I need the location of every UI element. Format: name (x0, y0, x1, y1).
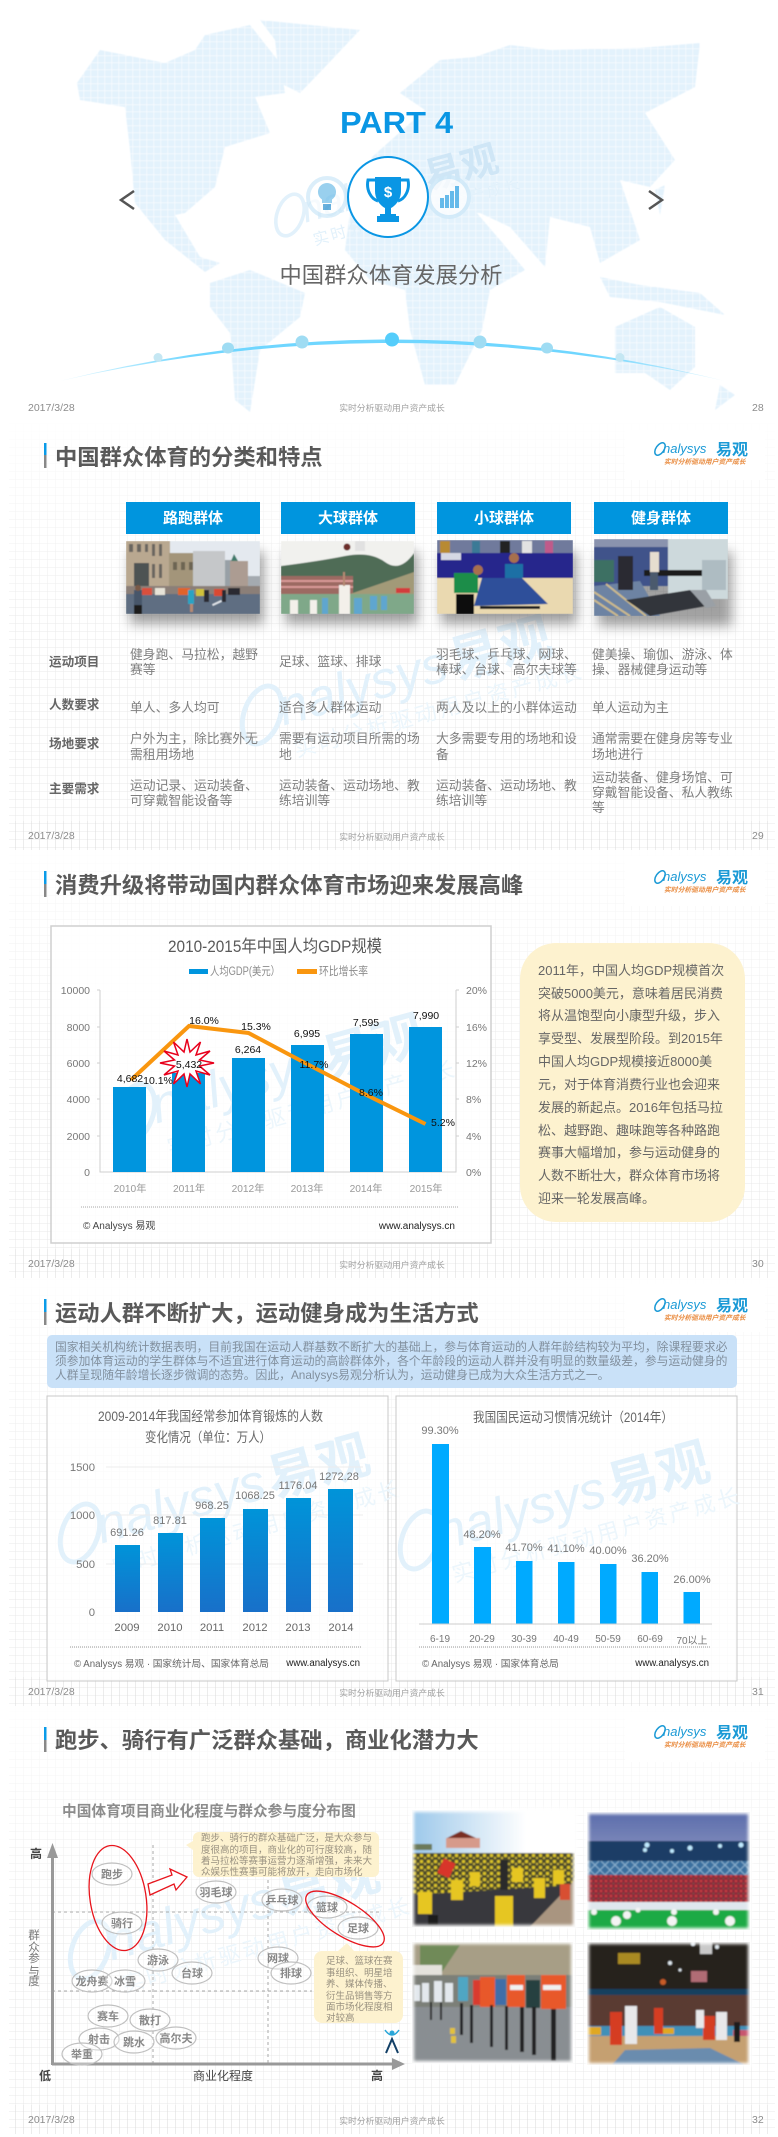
logo: 实时分析驱动用户资产成长 (664, 886, 747, 894)
callout: yellow commentary (520, 943, 745, 1222)
value labels: 4,682 (117, 1073, 143, 1085)
column header: 健身群体: 健身群体 (631, 509, 691, 527)
red arrow (148, 1869, 187, 1895)
right axis labels: 20% (466, 985, 487, 997)
sport bubbles: 骑行 (111, 1916, 133, 1930)
watermark: nalysys (271, 635, 454, 737)
text block: blue summary: 人群呈现随年龄增长逐步微调的态势。因此，Analysys易观分析认为，运动健身已成为大众生活方式之一。 (55, 1368, 609, 1382)
right axis labels: 0% (466, 1167, 481, 1179)
vertical axis label: 众 (28, 1941, 40, 1954)
icon: trophy in circle: $ (384, 184, 393, 201)
sport bubbles: 举重 (71, 2047, 93, 2061)
watermark: 实时分析驱动用户资产成长 (291, 658, 587, 762)
row: 人数要求: 适合多人群体运动 (279, 700, 382, 715)
watermark: 易观 (600, 1433, 716, 1517)
logo: 实时分析驱动用户资产成长 (664, 1741, 747, 1749)
row: 运动项目: 赛等 (130, 662, 156, 677)
footer: 31 (752, 1686, 764, 1698)
timeline arc with dots (60, 332, 725, 381)
year labels: 2013 (285, 1622, 311, 1634)
left axis labels: 2000 (67, 1131, 90, 1143)
watermark: 实时分析驱动用户资产成长 (449, 1483, 745, 1587)
axis labels: 商业化程度 (193, 2068, 253, 2083)
chart title: 变化情况（单位：万人） (145, 1430, 271, 1445)
row: 人数要求: 单人运动为主 (592, 700, 669, 715)
year labels: 2014年 (350, 1182, 382, 1195)
year labels: 2015年 (410, 1182, 442, 1195)
row: 主要需求: 主要需求 (49, 781, 100, 796)
watermark: 实时分析驱动用户资产成长 (109, 1476, 405, 1580)
panel: exercise habits by age chart (380, 1396, 745, 1681)
title: 中国群众体育的分类和特点 (55, 444, 323, 470)
value labels: 16.0% (189, 1015, 219, 1027)
row: 场地要求: 场地进行 (592, 747, 643, 762)
world map background (77, 20, 735, 412)
source line: www.analysys.cn (285, 1658, 360, 1669)
bars (432, 1444, 700, 1624)
watermark (222, 595, 587, 777)
age labels (430, 1634, 708, 1647)
background grid (9, 423, 775, 850)
sport bubbles: 排球 (280, 1966, 302, 1980)
row: 人数要求: 单人、多人均可 (130, 700, 220, 715)
vertical axis label: 参 (28, 1951, 40, 1965)
icon: trophy in circle (348, 157, 428, 237)
logo: 实时分析驱动用户资产成长 (664, 1314, 747, 1322)
age labels: 60-69 (637, 1634, 663, 1645)
callout: yellow commentary: 人数不断壮大，群众体育市场将 (538, 1168, 720, 1183)
watermark: nalysys (429, 1460, 612, 1562)
callout: football and basketball commentary: 衍生品销售等方 (326, 1990, 393, 2002)
left axis labels: 4000 (67, 1094, 90, 1106)
gridlines (106, 1467, 363, 1564)
footer (28, 830, 764, 842)
axis labels (30, 1846, 383, 2083)
bars (115, 1489, 353, 1612)
value labels: 5,432 (176, 1059, 202, 1071)
value labels: 817.81 (153, 1515, 187, 1527)
watermark: 实时分析驱动用户资产成长 (164, 1056, 460, 1160)
value labels: 691.26 (110, 1527, 144, 1539)
row: 运动项目: 羽毛球、乒乓球、网球、 (436, 647, 577, 662)
subtitle: 中国群众体育发展分析 (280, 263, 502, 288)
value labels: 7,990 (413, 1010, 439, 1022)
watermark: 易观 (420, 137, 503, 198)
heading: PART 4: PART 4 (340, 105, 454, 140)
row: 主要需求: 运动记录、运动装备、 (130, 778, 258, 793)
sport bubbles: 足球 (347, 1921, 369, 1935)
footer (28, 402, 764, 414)
chevron left (121, 191, 134, 209)
footer: 30 (752, 1258, 764, 1270)
chart title: 2010-2015年中国人均GDP规模 (168, 937, 382, 956)
year labels: 2012年 (232, 1182, 264, 1195)
left axis labels: 10000 (61, 985, 90, 997)
watermark: nalysys (144, 1033, 327, 1135)
row: 场地要求: 地 (279, 747, 292, 762)
footer: 实时分析驱动用户资产成长 (339, 831, 445, 842)
logo (653, 1297, 748, 1322)
year labels: 2012 (242, 1622, 268, 1634)
watermark: 实时分析驱动用户资产成长 (311, 174, 524, 249)
footer: 2017/3/28 (28, 402, 75, 414)
year labels: 2009 (114, 1622, 140, 1634)
year labels: 2010年 (114, 1182, 146, 1195)
right axis labels (466, 985, 487, 1179)
source line (70, 1647, 362, 1670)
year labels: 2011 (200, 1622, 224, 1634)
axis labels: 1500 (70, 1462, 95, 1474)
column header: 路跑群体: 路跑群体 (163, 509, 223, 527)
watermark: 易观 (442, 608, 558, 692)
vertical axis label (28, 1928, 40, 1988)
logo: nalysys (663, 1724, 707, 1739)
row: 主要需求: 运动装备、健身场馆、可 (592, 770, 733, 785)
value labels: 11.7% (300, 1059, 328, 1071)
text block: blue summary (47, 1335, 737, 1388)
value labels (117, 1010, 455, 1129)
row: 人数要求: 两人及以上的小群体运动 (436, 700, 577, 715)
row: 场地要求: 备 (436, 747, 449, 762)
value labels: 36.20% (631, 1553, 669, 1565)
panel: GDP chart (51, 926, 491, 1243)
axis arrows (47, 1843, 405, 2070)
logo: 易观 (716, 870, 748, 887)
value labels: 1068.25 (235, 1490, 275, 1502)
red ellipse: basketball and football (298, 1881, 392, 1957)
chart title (98, 1408, 323, 1445)
callout: yellow commentary: 松、越野跑、趣味跑等各种路跑 (538, 1123, 720, 1138)
legend: 人均GDP(美元） (210, 964, 280, 978)
value labels: 8.6% (359, 1087, 383, 1099)
photo: basketball arena (587, 1942, 750, 2065)
legend (189, 964, 368, 978)
callout: football and basketball commentary: 足球、篮球在赛 (326, 1955, 393, 1967)
row: 场地要求: 需租用场地 (130, 747, 194, 762)
row: 主要需求: 练培训等 (436, 793, 487, 808)
axis labels: 高 (30, 1846, 42, 1861)
row: 场地要求: 户外为主，除比赛外无 (130, 731, 258, 746)
value labels: 41.70% (505, 1542, 543, 1554)
left axis labels: 0 (84, 1167, 90, 1179)
logo: nalysys (663, 1297, 707, 1312)
callout: running and cycling commentary: 度很高的项目，商业化的可行度较高，随 (201, 1844, 373, 1856)
logo: nalysys (663, 869, 707, 884)
callout: running and cycling commentary: 跑步、骑行的群众基础广泛，是大众参与 (201, 1832, 372, 1844)
left axis labels (61, 985, 90, 1179)
row: 人数要求 (49, 697, 669, 715)
watermark: 易观 (260, 1426, 376, 1510)
left axis labels: 8000 (67, 1022, 90, 1034)
axis labels: 0 (89, 1607, 95, 1619)
footer: 32 (752, 2114, 764, 2126)
title: 运动人群不断扩大，运动健身成为生活方式 (55, 1300, 479, 1326)
callout: yellow commentary: 享受型、发展型阶段。到2015年 (538, 1031, 723, 1046)
logo: 易观 (716, 1725, 748, 1742)
watermark (40, 1413, 405, 1595)
source line: © Analysys 易观 · 国家统计局、国家体育总局 (74, 1657, 269, 1670)
legend: 环比增长率 (319, 964, 368, 978)
value labels: 1272.28 (319, 1471, 359, 1483)
watermark (50, 1830, 415, 2012)
sport bubbles: 龙舟赛 (76, 1974, 108, 1988)
vertical axis label: 度 (28, 1974, 40, 1988)
row: 主要需求: 练培训等 (279, 793, 330, 808)
slide 5: commercial potential (9, 1706, 775, 2134)
dashed quadrant lines (52, 1845, 382, 2063)
callout: starburst (160, 1039, 214, 1087)
callout: football and basketball commentary: 事组织、明星培 (326, 1967, 393, 1979)
column header: 小球群体 (437, 502, 571, 534)
watermark: nalysys (89, 1453, 272, 1555)
slide 1: section cover (28, 20, 764, 414)
callout: yellow commentary: 元，对于体育消费行业也会迎来 (538, 1077, 720, 1092)
column header: 路跑群体 (126, 502, 260, 534)
photo: cycling peloton (412, 1942, 573, 2063)
red ellipse: running and cycling (82, 1841, 154, 1955)
row: 运动项目: 健美操、瑜伽、游泳、体 (592, 647, 733, 662)
logo: 易观 (716, 442, 748, 459)
slide 3: GDP chart (9, 850, 775, 1278)
column header: 大球群体 (281, 502, 415, 534)
logo (653, 1724, 748, 1749)
source line: © Analysys 易观 (83, 1220, 155, 1232)
footer (28, 1686, 764, 1698)
background grid (9, 850, 775, 1278)
vertical axis label: 与 (28, 1965, 40, 1978)
sport bubbles: 台球 (181, 1966, 203, 1980)
year labels: 2011年 (173, 1182, 205, 1195)
row: 主要需求: 运动装备、运动场地、教 (279, 778, 420, 793)
watermark: nalysys (99, 1870, 282, 1972)
row: 主要需求: 等 (592, 800, 605, 815)
age labels: 6-19 (430, 1634, 450, 1645)
year labels: 2010 (157, 1622, 183, 1634)
title: 跑步、骑行有广泛群众基础，商业化潜力大 (55, 1728, 479, 1753)
baseline (419, 1623, 712, 1625)
photo: marathon at Tiananmen (412, 1810, 575, 1927)
footer: 29 (752, 830, 764, 842)
row: 运动项目: 运动项目 (49, 655, 99, 669)
row: 人数要求: 人数要求 (49, 697, 100, 712)
value labels: 6,995 (294, 1028, 320, 1040)
callout: yellow commentary: 中国人均GDP规模接近8000美 (538, 1054, 712, 1069)
row: 主要需求 (49, 770, 733, 815)
right axis labels: 12% (466, 1058, 487, 1070)
left axis labels: 6000 (67, 1058, 90, 1070)
logo: 易观 (716, 1298, 748, 1315)
sport bubbles: 冰雪 (114, 1974, 136, 1988)
source line: www.analysys.cn (378, 1221, 455, 1232)
chart title: 我国国民运动习惯情况统计（2014年） (473, 1409, 673, 1425)
slide 2: classification table (9, 423, 775, 850)
column header: 小球群体: 小球群体 (474, 509, 534, 527)
sport bubbles: 散打 (139, 2013, 161, 2027)
age labels: 70以上 (676, 1635, 708, 1647)
column header: 大球群体: 大球群体 (318, 509, 378, 527)
sport bubbles: 乒乓球 (266, 1893, 298, 1907)
footer: 2017/3/28 (28, 1686, 75, 1698)
row: 运动项目: 足球、篮球、排球 (279, 654, 382, 669)
logo: nalysys (663, 441, 707, 456)
year labels: 2013年 (291, 1182, 323, 1195)
sport bubbles: 赛车 (97, 2009, 119, 2023)
sport bubbles: 射击 (88, 2032, 110, 2046)
value labels: 5.2% (431, 1117, 455, 1129)
source line (81, 1207, 458, 1232)
value labels: 99.30% (421, 1425, 459, 1437)
year labels (114, 1622, 354, 1634)
bars (113, 1027, 442, 1172)
axis labels: 低 (39, 2068, 51, 2083)
value labels: 48.20% (463, 1529, 501, 1541)
axis labels: 高 (371, 2068, 383, 2083)
sport bubbles: 跳水 (123, 2035, 145, 2049)
sport bubbles: 高尔夫 (160, 2031, 192, 2045)
row: 运动项目 (49, 647, 733, 677)
icon: runner logo (385, 2030, 399, 2053)
growth line (131, 1026, 426, 1124)
row: 场地要求 (49, 731, 733, 762)
logo (653, 441, 748, 466)
callout: yellow commentary: 2011年，中国人均GDP规模首次 (538, 963, 724, 978)
row: 运动项目: 棒球、台球、高尔夫球等 (436, 662, 577, 677)
icon: rising chart (429, 177, 469, 217)
value labels: 6,264 (235, 1044, 261, 1056)
value labels: 7,595 (353, 1017, 379, 1029)
sport bubbles: 跑步 (101, 1867, 123, 1881)
column header: 健身群体 (594, 502, 728, 534)
footer: 28 (752, 402, 764, 414)
chart title: 2009-2014年我国经常参加体育锻炼的人数 (98, 1408, 323, 1424)
right axis labels: 8% (466, 1094, 481, 1106)
watermark: 易观 (270, 1843, 386, 1927)
footer: 2017/3/28 (28, 830, 75, 842)
value labels: 1176.04 (279, 1480, 317, 1492)
row: 场地要求: 场地要求 (49, 736, 100, 751)
watermark (380, 1420, 745, 1602)
right axis labels: 4% (466, 1131, 481, 1143)
value labels (110, 1471, 359, 1539)
chevron right (649, 191, 662, 209)
watermark: 易观 (315, 1006, 431, 1090)
row: 运动项目: 健身跑、马拉松，越野 (130, 647, 258, 662)
age labels: 30-39 (511, 1634, 537, 1645)
row: 场地要求: 需要有运动项目所需的场 (279, 731, 420, 746)
age labels: 20-29 (469, 1634, 495, 1645)
watermark (95, 993, 460, 1175)
chart title: 中国体育项目商业化程度与群众参与度分布图 (62, 1802, 356, 1820)
value labels: 968.25 (195, 1500, 229, 1512)
source line (419, 1647, 710, 1670)
callout: yellow commentary: 迎来一轮发展高峰。 (538, 1191, 655, 1206)
footer: 实时分析驱动用户资产成长 (339, 402, 445, 413)
photo: table tennis (437, 540, 577, 624)
callout: running and cycling commentary: 众娱乐性赛事可能将放开，走向市场化 (201, 1866, 363, 1878)
watermark: 实时分析驱动用户资产成长 (119, 1893, 415, 1997)
background grid (9, 1706, 775, 2134)
sport bubbles: 羽毛球 (200, 1885, 232, 1899)
axis labels: 1000 (70, 1510, 95, 1522)
slide 4: sport participation (9, 1278, 775, 1706)
footer: 实时分析驱动用户资产成长 (339, 1687, 445, 1698)
sport bubbles (62, 1863, 378, 2065)
watermark: nalysys (296, 157, 428, 230)
photo: city marathon (126, 541, 264, 624)
photo: football stadium (587, 1812, 750, 1930)
background grid (9, 1278, 775, 1706)
row: 主要需求: 可穿戴智能设备等 (130, 793, 233, 808)
row: 运动项目: 操、器械健身运动等 (592, 662, 707, 677)
watermark (261, 129, 524, 260)
callout: yellow commentary: 赛事大幅增加，参与运动健身的 (538, 1145, 720, 1160)
footer (28, 1258, 764, 1270)
callout: football and basketball commentary: 对较高 (326, 2012, 355, 2024)
callout: yellow commentary: 将从温饱型向小康型升级，步入 (538, 1008, 720, 1023)
axis labels (70, 1462, 95, 1619)
chart: commercial vs participation matrix (28, 1802, 405, 2083)
callout: yellow commentary: 发展的新起点。2016年包括马拉 (538, 1100, 723, 1115)
age labels: 50-59 (595, 1634, 621, 1645)
source line: © Analysys 易观 · 国家体育总局 (422, 1657, 559, 1670)
value labels: 40.00% (589, 1545, 627, 1557)
callout: yellow commentary: 突破5000美元，意味着居民消费 (538, 986, 723, 1001)
callout: running and cycling commentary (186, 1832, 379, 1878)
row: 场地要求: 通常需要在健身房等专业 (592, 731, 733, 746)
row: 主要需求: 运动装备、运动场地、教 (436, 778, 577, 793)
footer: 2017/3/28 (28, 2114, 75, 2126)
footer: 2017/3/28 (28, 1258, 75, 1270)
value labels: 26.00% (673, 1574, 711, 1586)
callout: football and basketball commentary (314, 1943, 403, 2024)
footer (28, 2114, 764, 2126)
panel: yearly participants chart (40, 1396, 405, 1681)
row: 主要需求: 穿戴智能设备、私人教练 (592, 785, 733, 800)
logo (653, 869, 748, 894)
right axis labels: 16% (466, 1022, 487, 1034)
sport bubbles: 篮球 (316, 1900, 338, 1914)
row: 场地要求: 大多需要专用的场地和设 (436, 731, 577, 746)
axes (97, 990, 459, 1172)
title: 消费升级将带动国内群众体育市场迎来发展高峰 (55, 872, 523, 898)
callout: football and basketball commentary: 面市场化程度相 (326, 2001, 393, 2013)
photo: gym treadmills (594, 539, 732, 626)
source line: www.analysys.cn (634, 1658, 709, 1669)
sport bubbles: 游泳 (147, 1953, 169, 1967)
sport bubbles: 网球 (267, 1951, 289, 1965)
callout: running and cycling commentary: 着马拉松等赛事运营力逐渐增强，未来大 (201, 1855, 373, 1867)
logo: 实时分析驱动用户资产成长 (664, 458, 747, 466)
value labels: 41.10% (547, 1543, 585, 1555)
text block: blue summary: 国家相关机构统计数据表明，目前我国在运动人群基数不断扩大的基础上，参与体育运动的人群年龄结构较为平均，除课程要求必 (55, 1340, 728, 1354)
icon: light bulb (308, 178, 346, 216)
year labels (114, 1182, 442, 1195)
footer: 实时分析驱动用户资产成长 (339, 1259, 445, 1270)
footer: 实时分析驱动用户资产成长 (339, 2115, 445, 2126)
value labels (421, 1425, 711, 1586)
value labels: 15.3% (241, 1021, 271, 1033)
axis labels: 500 (76, 1559, 95, 1571)
year labels: 2014 (328, 1622, 354, 1634)
value labels: 10.1% (143, 1075, 173, 1087)
age labels: 40-49 (553, 1634, 579, 1645)
text block: blue summary: 须参加体育运动的学生群体与不适宜进行体育运动的高龄群体外，各个年龄段的运动人群并没有明显的数量级差，参与运动健身的 (55, 1354, 727, 1368)
vertical axis label: 群 (28, 1928, 40, 1942)
callout: football and basketball commentary: 养、媒体传播、 (326, 1978, 393, 1990)
photo: basketball outdoors (281, 541, 418, 624)
